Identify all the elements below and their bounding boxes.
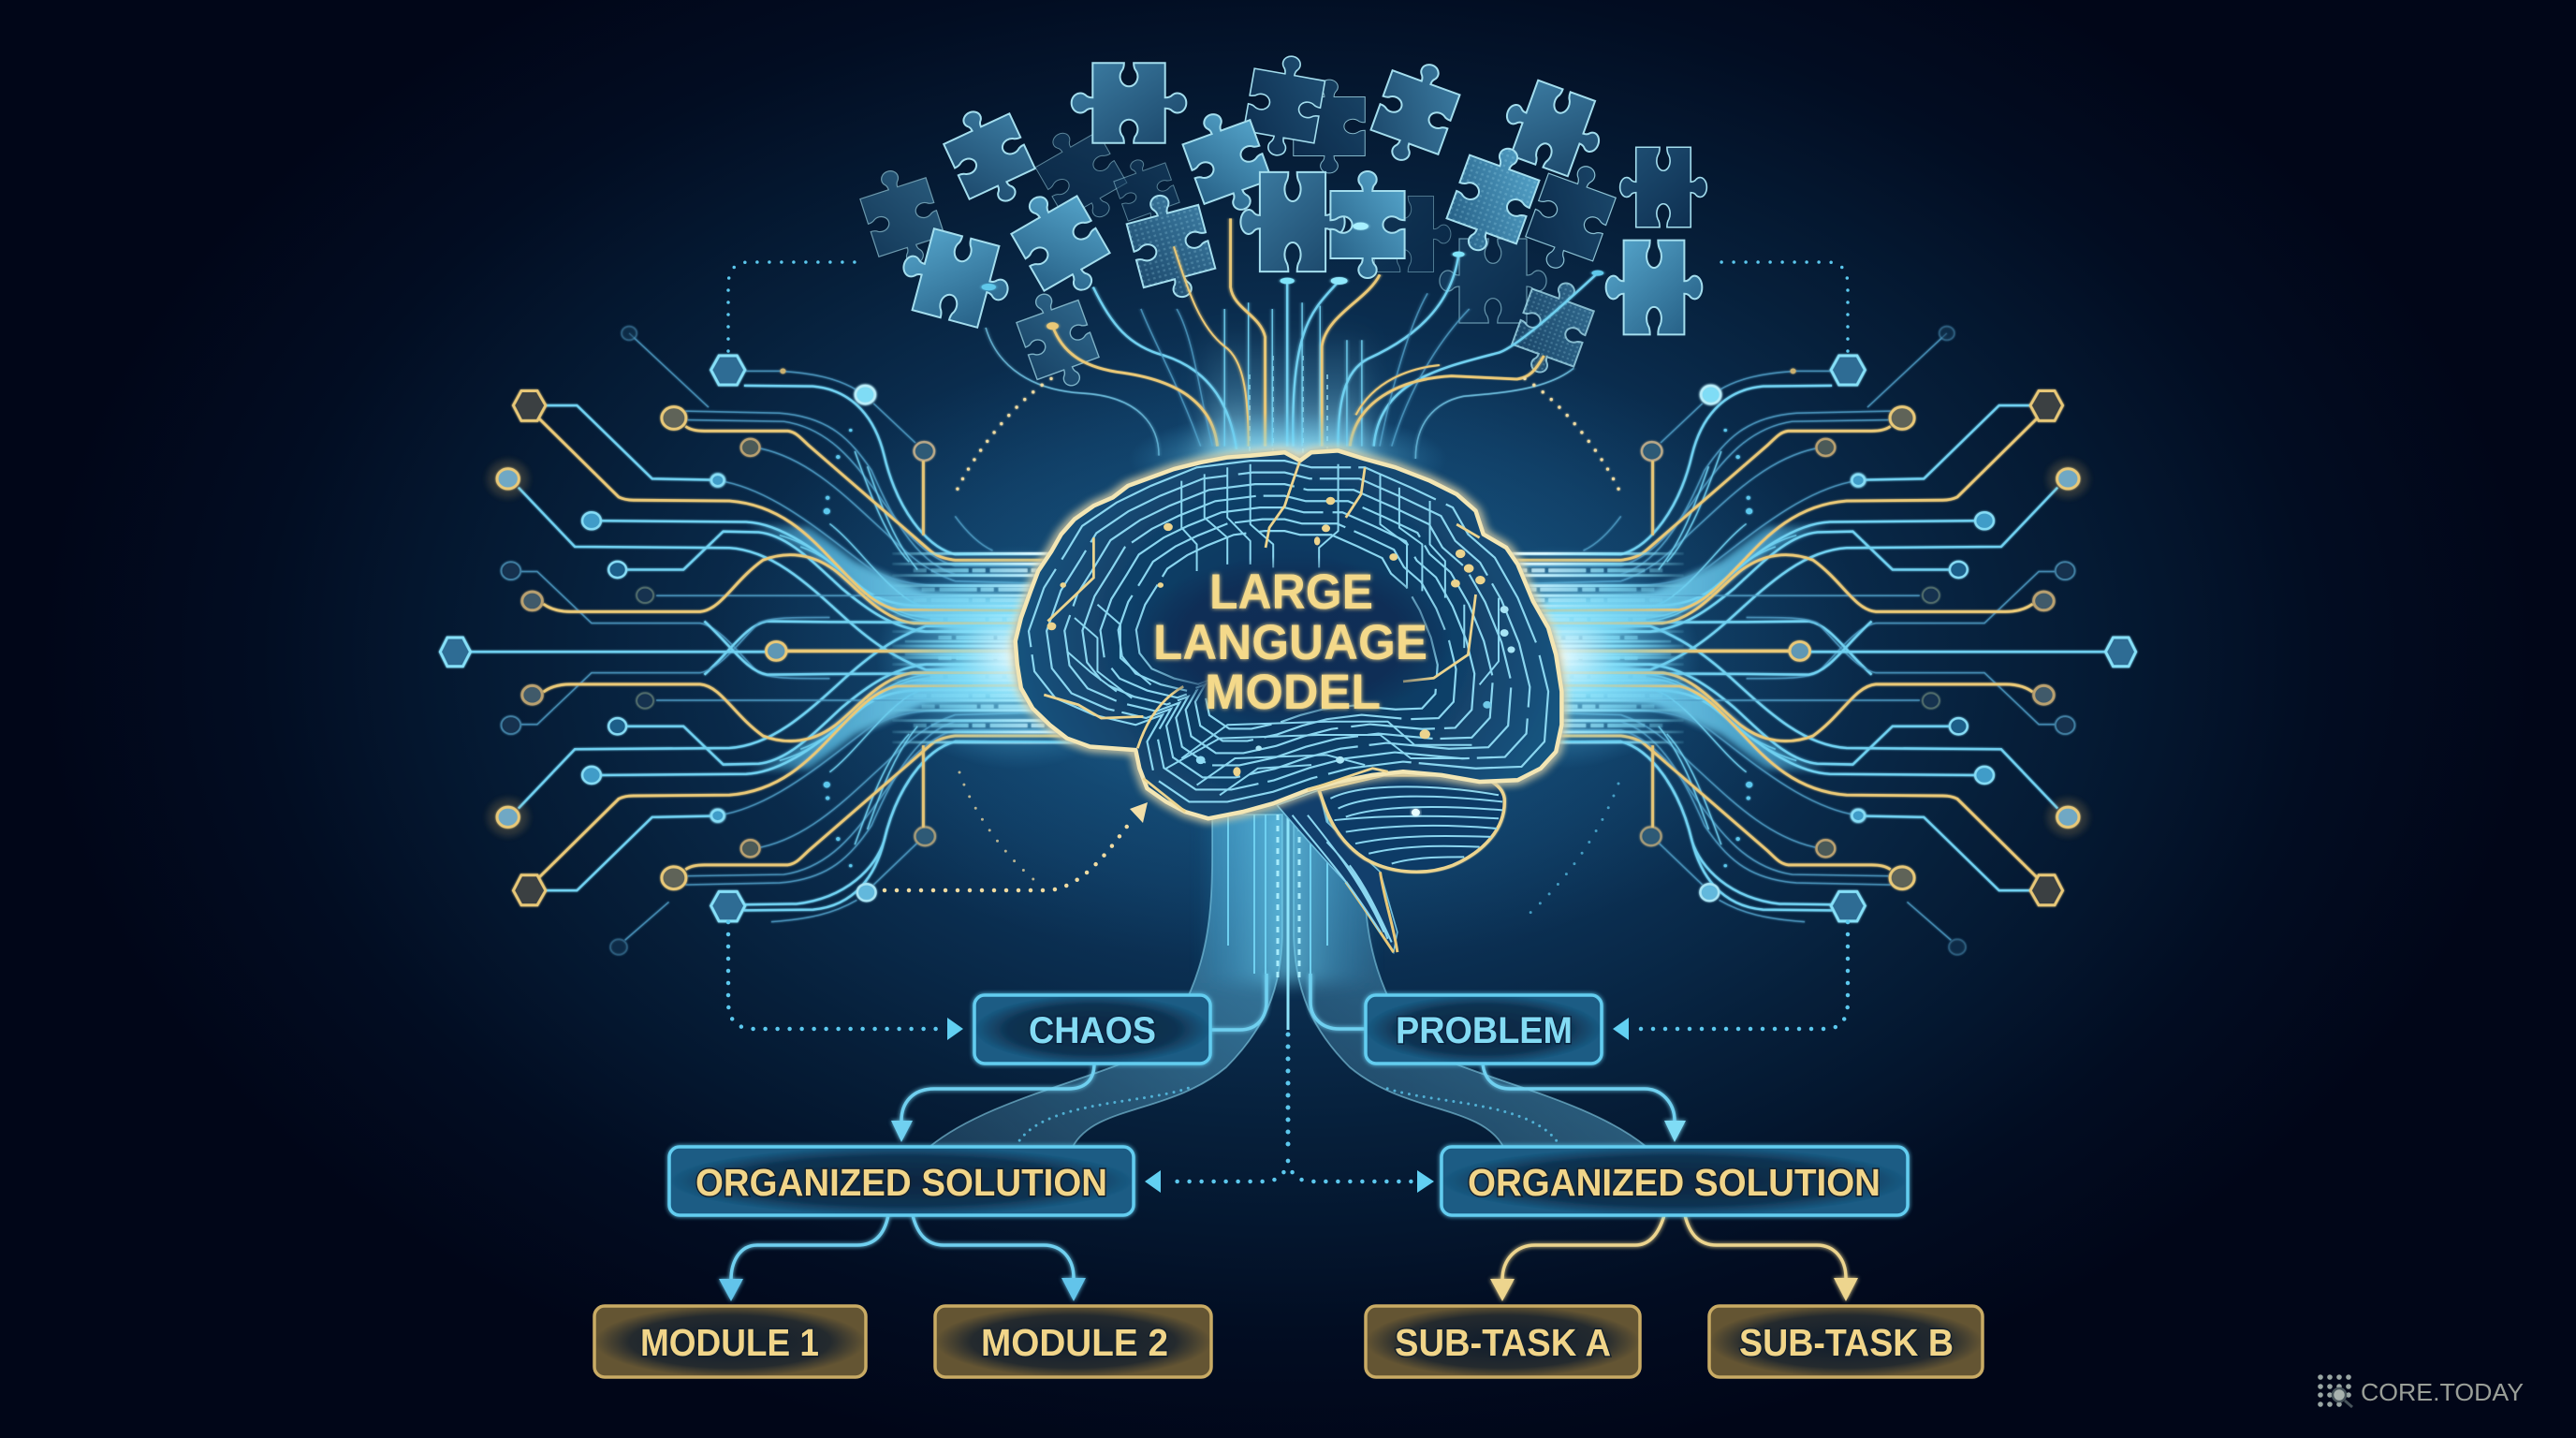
cerebellum spark bbox=[1412, 809, 1420, 816]
circuit traces inside brain bbox=[1029, 461, 1548, 801]
circuit lines left side bbox=[440, 327, 1102, 955]
box: chaos bbox=[974, 995, 1210, 1064]
box: problem: PROBLEM bbox=[1396, 1010, 1573, 1051]
flow ribbons below brain bbox=[929, 814, 1647, 1147]
puzzle pieces cluster bbox=[855, 51, 1706, 396]
box: problem bbox=[1366, 995, 1602, 1064]
title: Large Language Model: MODEL bbox=[1205, 665, 1381, 720]
box: module 1 bbox=[594, 1306, 866, 1377]
cerebellum folds bbox=[1330, 786, 1502, 863]
connectors: center dotted split bbox=[947, 1018, 1629, 1193]
arrows: blue and gold routing bbox=[719, 974, 1858, 1301]
watermark: core.today: CORE.TODAY bbox=[2361, 1378, 2524, 1406]
box: module 2: MODULE 2 bbox=[981, 1321, 1168, 1364]
title: Large Language Model: LARGE bbox=[1209, 565, 1373, 620]
brain stem data column bbox=[1203, 805, 1371, 1030]
hot glow at brain flanks bbox=[875, 412, 1701, 770]
box: sub-task b: SUB-TASK B bbox=[1739, 1321, 1954, 1364]
dark plate behind title bbox=[1132, 556, 1453, 723]
circuit node dots bbox=[1047, 497, 1515, 776]
central glow behind brain bbox=[708, 328, 1868, 964]
icon: dotted magnifier logo bbox=[2318, 1374, 2352, 1407]
brain bbox=[1016, 450, 1561, 952]
box: organized solution left bbox=[669, 1147, 1134, 1215]
box: sub-task a bbox=[1366, 1306, 1640, 1377]
box: organized solution right: ORGANIZED SOLUTION bbox=[1468, 1161, 1881, 1204]
box: sub-task b bbox=[1709, 1306, 1983, 1377]
title: Large Language Model: LANGUAGE bbox=[1153, 615, 1427, 670]
box: module 1: MODULE 1 bbox=[640, 1321, 819, 1364]
box: module 2 bbox=[935, 1306, 1211, 1377]
dotted connectors from outer hexagons bbox=[728, 262, 1848, 1029]
cerebrum body bbox=[1016, 450, 1561, 818]
title: Large Language Model bbox=[1153, 565, 1427, 720]
brainstem bbox=[1277, 790, 1398, 952]
faint dotted arcs around brain bbox=[959, 772, 1618, 917]
icon: gold dotted arrow into brain bbox=[885, 802, 1148, 890]
tendrils from brain to puzzle pieces bbox=[982, 218, 1603, 459]
cerebellum bbox=[1319, 775, 1504, 872]
circuit lines right side bbox=[1474, 327, 2136, 955]
box: chaos: CHAOS bbox=[1029, 1010, 1156, 1051]
box: sub-task a: SUB-TASK A bbox=[1395, 1321, 1611, 1364]
box: organized solution right bbox=[1442, 1147, 1908, 1215]
brainstem fibres bbox=[1293, 815, 1392, 942]
box: organized solution left: ORGANIZED SOLUTION bbox=[695, 1161, 1107, 1204]
brainstem gold edge bbox=[1346, 872, 1398, 952]
stem of data lines above brain bbox=[1208, 328, 1367, 468]
watermark: core.today bbox=[2318, 1374, 2524, 1407]
gold sulci bbox=[1044, 461, 1480, 812]
